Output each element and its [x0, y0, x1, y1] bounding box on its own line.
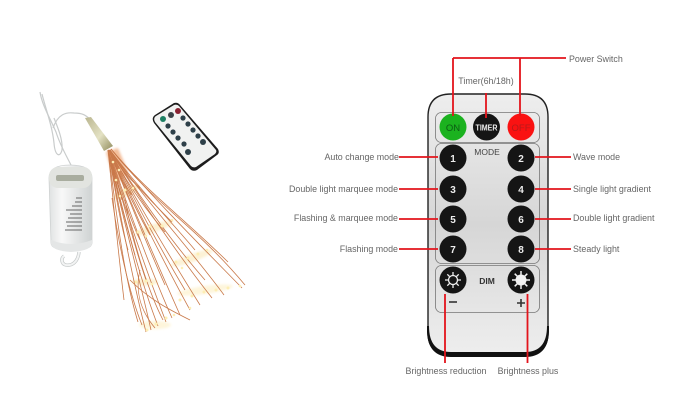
mode buttons: 5 [450, 215, 456, 226]
small remote photo [153, 103, 219, 171]
callout labels: Timer(6h/18h) [458, 76, 514, 86]
LED dots [112, 161, 241, 332]
dim controls: DIM [479, 276, 495, 286]
callout labels: Single light gradient [573, 184, 651, 194]
mode buttons: 3 [450, 185, 456, 196]
callout labels: Wave mode [573, 152, 620, 162]
hook [62, 252, 79, 265]
mode buttons [440, 144, 534, 262]
callout labels: Double light marquee mode [289, 184, 398, 194]
callout labels: Brightness plus [498, 366, 559, 376]
mode buttons: 6 [518, 215, 524, 226]
mode buttons: 2 [518, 154, 524, 165]
callout labels: Flashing & marquee mode [294, 213, 398, 223]
mode buttons: 1 [450, 154, 456, 165]
mode buttons: 4 [518, 185, 524, 196]
callout labels [289, 54, 655, 376]
callout labels: Power Switch [569, 54, 623, 64]
product photo: firework string light [40, 92, 245, 332]
callout labels: Steady light [573, 244, 620, 254]
callout lines [399, 58, 571, 363]
callout labels: Brightness reduction [406, 366, 487, 376]
dim controls [440, 266, 534, 307]
mode buttons: 8 [518, 245, 524, 256]
panel outlines [436, 112, 540, 312]
power buttons: TIMER [476, 122, 498, 132]
warm glow [106, 148, 233, 329]
mode label: MODE [474, 147, 500, 157]
mode buttons: 7 [450, 245, 456, 256]
cone connector [85, 117, 113, 151]
callout labels: Auto change mode [324, 152, 399, 162]
power buttons [440, 114, 534, 140]
callout labels: Double light gradient [573, 213, 655, 223]
remote body [428, 94, 548, 356]
battery case [49, 165, 92, 265]
power buttons: ON [446, 123, 460, 134]
power buttons: OFF [512, 123, 531, 134]
light strands [108, 149, 245, 332]
callout labels: Flashing mode [340, 244, 398, 254]
wire [40, 92, 90, 167]
main remote diagram [428, 94, 548, 356]
